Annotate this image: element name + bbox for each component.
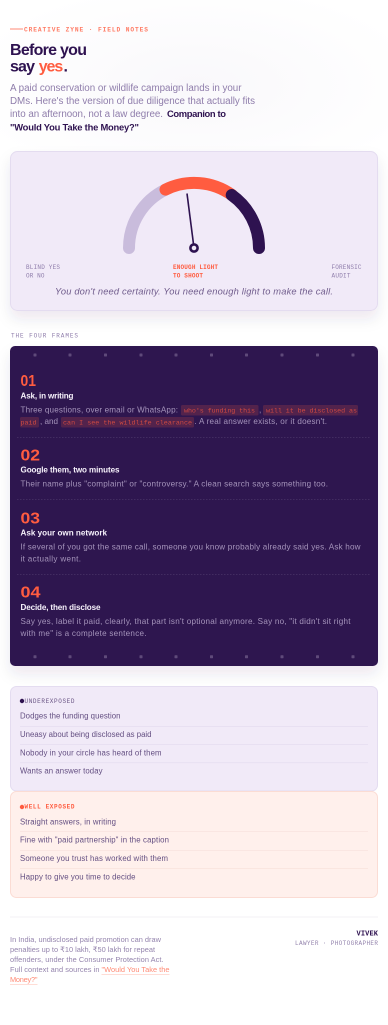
panel: well exposed [10,792,378,898]
list: well exposed signs: Straight answers, in writing [20,817,116,826]
frame 01: will it be disclosed as [266,408,357,416]
gauge label: centre: ENOUGH LIGHT [173,264,218,271]
frame 03 [20,510,361,564]
footer note: offenders, under the Consumer Protection Act. [10,955,164,964]
frame 03: it actually went. [20,554,81,564]
frame 01: . A real answer exists, or it doesn't. [194,417,327,426]
segment: blind [129,190,166,248]
frame 04 [20,585,351,638]
footer note: penalties up to ₹10 lakh, ₹50 lakh for repeat [10,945,155,954]
gauge label: right [332,264,362,280]
segment: forensic [232,195,259,248]
frame 01 [20,373,358,428]
footer note: In India, undisclosed paid promotion can draw [10,935,162,944]
gauge label: left [26,264,60,280]
frame 01: paid [20,419,36,427]
header [10,26,255,132]
needle [187,194,194,248]
title: Before you [10,42,87,59]
list: underexposed signs: Nobody in your circle has heard of them [20,748,162,757]
panel: gauge [10,152,378,310]
gauge chart [129,183,259,252]
title [10,42,87,76]
frame 01: , [259,406,261,414]
intro text: Companion to [167,108,226,119]
frame 03: If several of you got the same call, someone you know probably already said yes. Ask how [20,542,361,552]
frame 01: Ask, in writing [20,392,74,401]
list: well exposed signs: Fine with "paid partnership" in the caption [20,836,169,845]
list: underexposed signs [20,712,368,776]
footer note [10,935,170,985]
heading: underexposed: UNDEREXPOSED [24,698,75,705]
byline: LAWYER · PHOTOGRAPHER [295,940,378,947]
frame 01: who's funding this [184,408,255,416]
frame 02: Google them, two minutes [20,466,120,475]
title: . [64,58,68,76]
byline: VIVEK [356,931,379,939]
list: underexposed signs: Wants an answer today [20,767,103,776]
byline [295,931,379,947]
panel: four frames [10,346,378,666]
footer note: Full context and sources in [10,965,100,974]
intro text: into an afternoon, not a law degree. [10,109,163,120]
intro text: A paid conservation or wildlife campaign lands in your [10,83,242,94]
heading: well exposed: WELL EXPOSED [24,804,75,811]
intro text: "Would You Take the Money?" [10,122,139,132]
title: yes [39,58,63,76]
footer link: Money?" [10,975,38,984]
list: underexposed signs: Uneasy about being disclosed as paid [20,730,152,739]
title: say [10,58,35,76]
list: well exposed signs: Happy to give you time to decide [20,872,136,881]
footer link [10,965,170,985]
frame 01: 01 [20,373,36,390]
gauge label: right: AUDIT [332,272,351,280]
gauge label: centre: TO SHOOT [173,272,203,280]
section label: THE FOUR FRAMES [11,333,78,340]
film perforations top [34,354,354,356]
gauge label: left: OR NO [26,272,45,280]
panel: underexposed [10,686,378,791]
frame 04: with me" is a complete sentence. [20,629,146,638]
frame 02 [20,448,328,489]
intro text [10,83,255,132]
list: well exposed signs [20,817,368,881]
frame 01: Three questions, over email or WhatsApp: [20,406,178,414]
frame 01: can I see the wildlife clearance [63,419,192,427]
list: underexposed signs: Dodges the funding question [20,712,120,721]
frame 04: Decide, then disclose [20,603,101,612]
gauge label: left: BLIND YES [26,264,60,271]
gauge label: right: FORENSIC [332,264,362,271]
segment: enough light [166,183,232,195]
intro text: DMs. Here's the version of due diligence that actually fits [10,96,255,107]
footer link: "Would You Take the [102,965,170,974]
needle hub [190,244,198,252]
gauge label: centre [173,264,218,280]
eyebrow: CREATIVE ZYNE · FIELD NOTES [24,26,148,34]
frame 01: , and [40,417,58,426]
frame 02: Their name plus "complaint" or "controversy." A clean search says something too. [20,480,328,489]
film perforations bottom [34,655,354,658]
frame 03: Ask your own network [20,529,107,538]
frame 02: 02 [20,448,40,464]
list: well exposed signs: Someone you trust has worked with them [20,854,168,863]
frame 03: 03 [20,510,40,527]
frame 04: 04 [20,585,41,602]
frame 04: Say yes, label it paid, clearly, that part isn't optional anymore. Say no, "it didn't sit right [20,617,351,626]
gauge caption: You don't need certainty. You need enough light to make the call. [55,287,333,297]
